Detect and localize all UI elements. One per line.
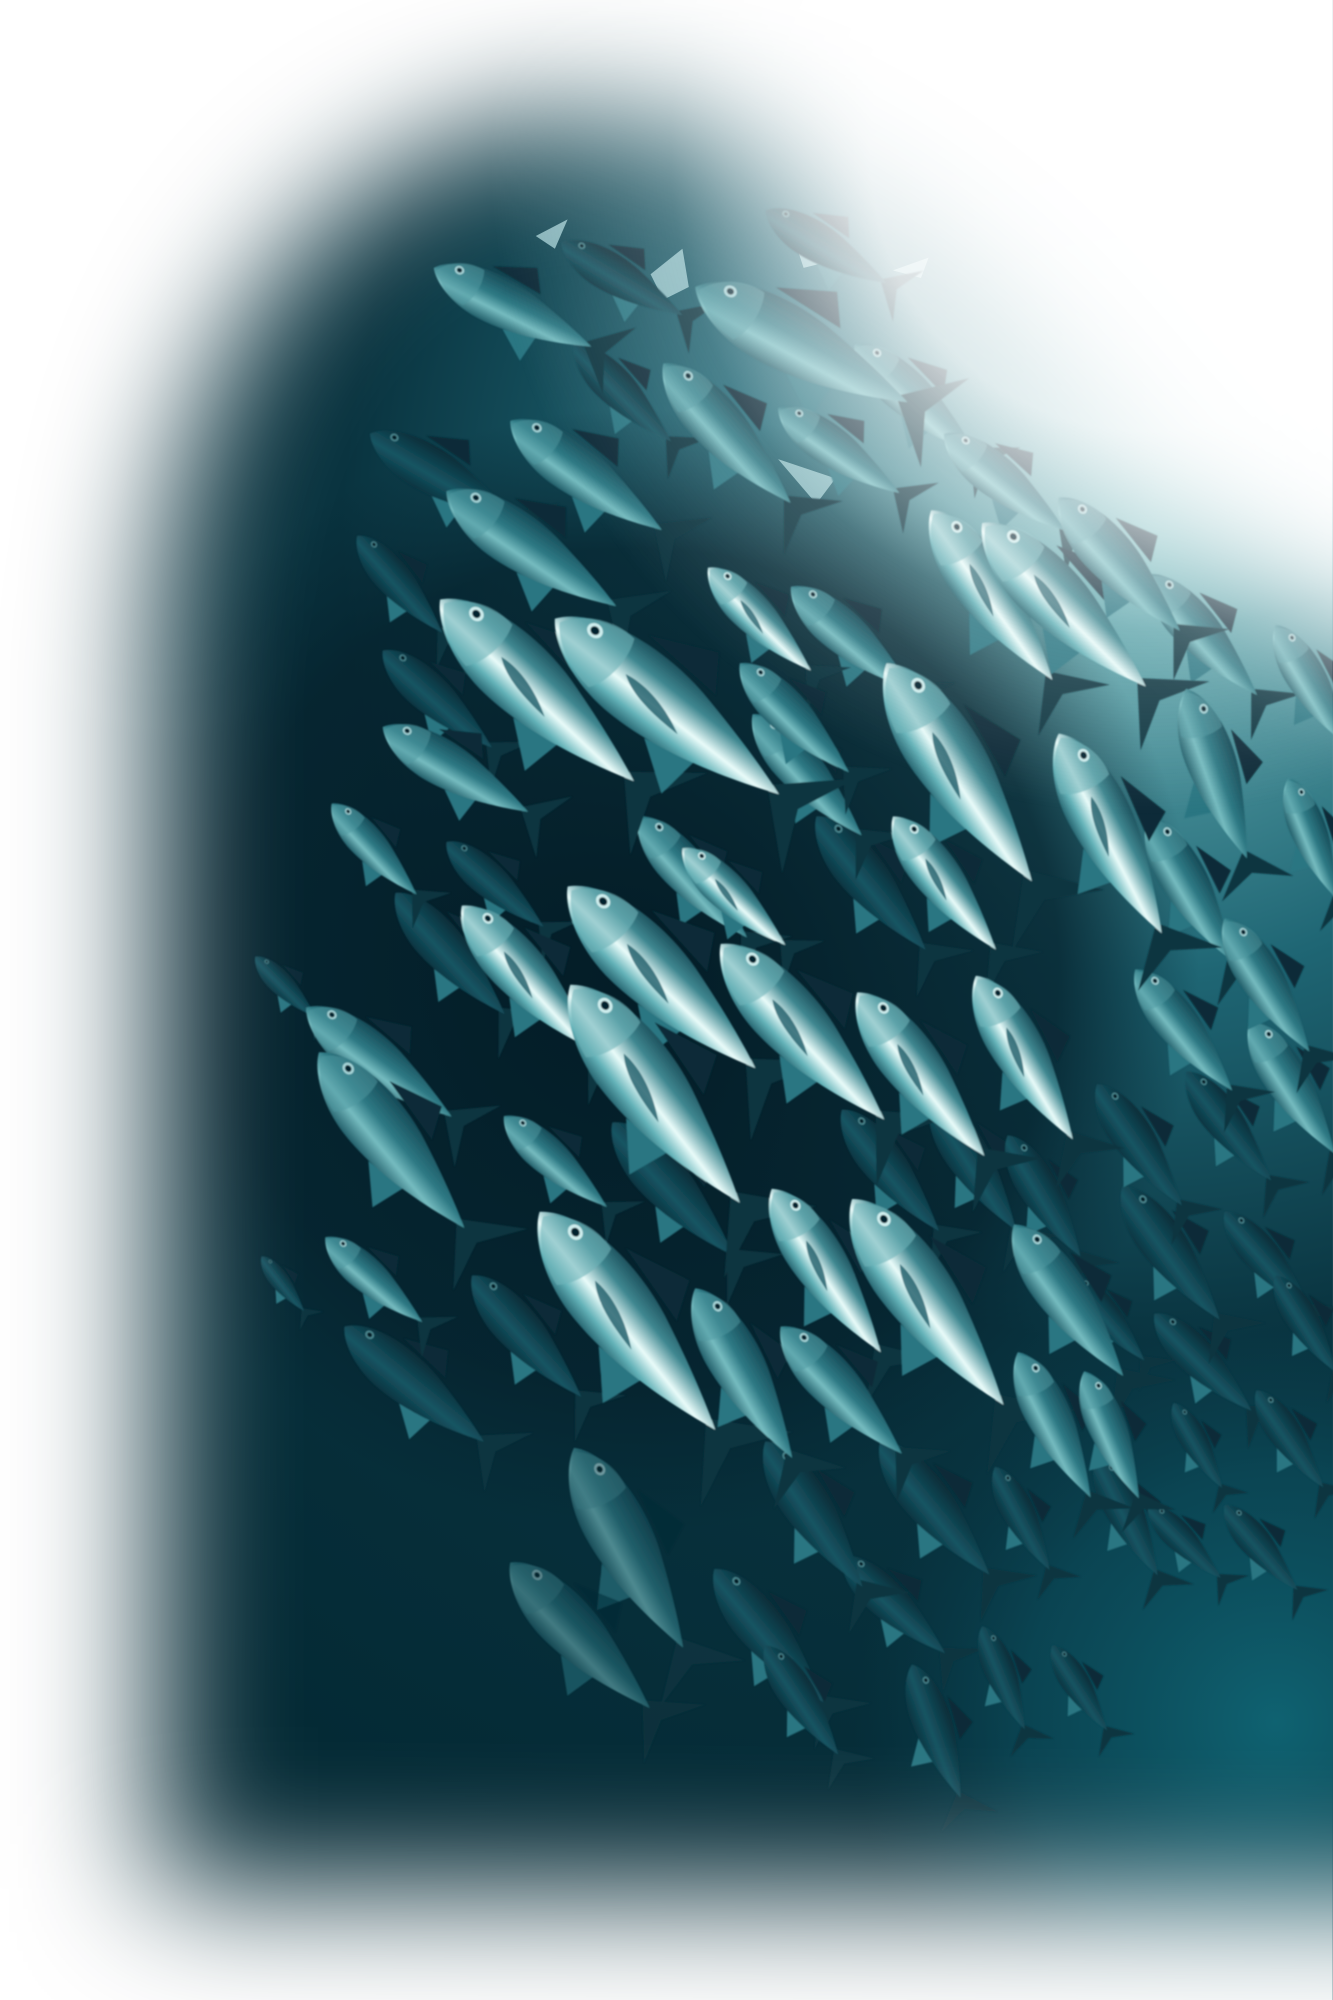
upper right fish, pale in the light (279, 179, 1333, 1362)
school of fish (240, 179, 1333, 1834)
light shards behind the school (536, 219, 929, 504)
central bright fish (275, 446, 1233, 1769)
distant dark fish (240, 395, 1333, 1834)
